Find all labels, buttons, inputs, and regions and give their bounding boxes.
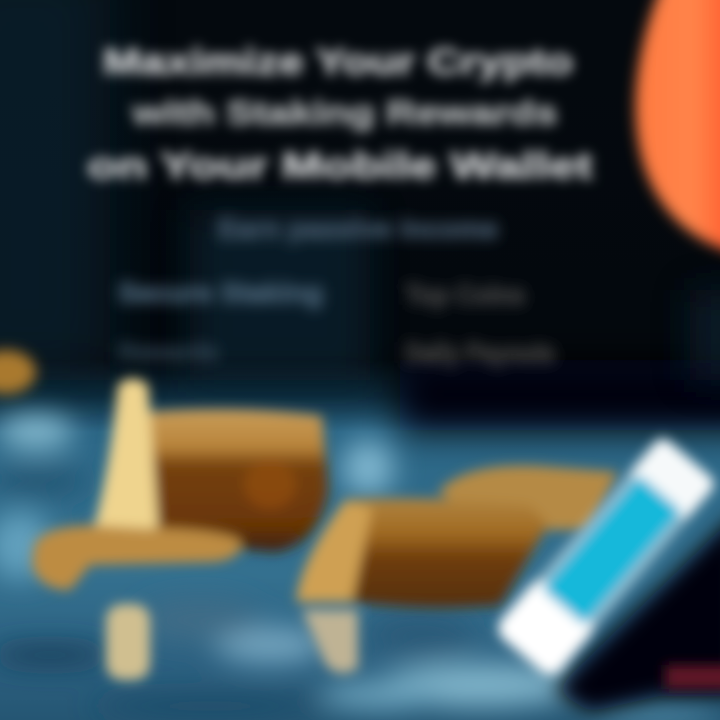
water waves <box>0 415 720 720</box>
left column text: Secure Staking <box>118 277 323 308</box>
left column text <box>118 277 323 366</box>
title: Maximize Your Crypto <box>103 41 573 82</box>
title: with Staking Rewards <box>131 94 557 131</box>
right column text: Top Coins <box>405 279 525 310</box>
gold side <box>296 500 372 602</box>
red accent <box>665 665 720 689</box>
upper white end <box>629 435 718 522</box>
phone shadow <box>555 510 720 712</box>
left column text: Rewards <box>118 339 218 366</box>
gold stack left <box>32 378 328 680</box>
title: on Your Mobile Wallet <box>88 145 593 186</box>
gold post <box>92 378 158 535</box>
gold reflection <box>302 610 358 673</box>
right column text <box>405 279 555 368</box>
gold reflection <box>106 604 150 680</box>
device body <box>494 435 718 679</box>
icon: mobile device <box>493 434 719 680</box>
gold block <box>150 409 328 552</box>
gold block front <box>340 498 548 608</box>
flame glow <box>636 0 720 254</box>
cyan screen <box>542 475 682 625</box>
gold block back <box>438 466 618 530</box>
gold stack right <box>296 466 618 673</box>
orange highlight <box>244 461 296 509</box>
right column text: Daily Payouts <box>405 337 555 368</box>
gold base <box>32 525 241 590</box>
subtitle: Earn passive income <box>218 213 498 244</box>
icon: gold coin edge left <box>0 350 36 394</box>
title <box>88 41 593 186</box>
lower white end <box>493 575 599 680</box>
